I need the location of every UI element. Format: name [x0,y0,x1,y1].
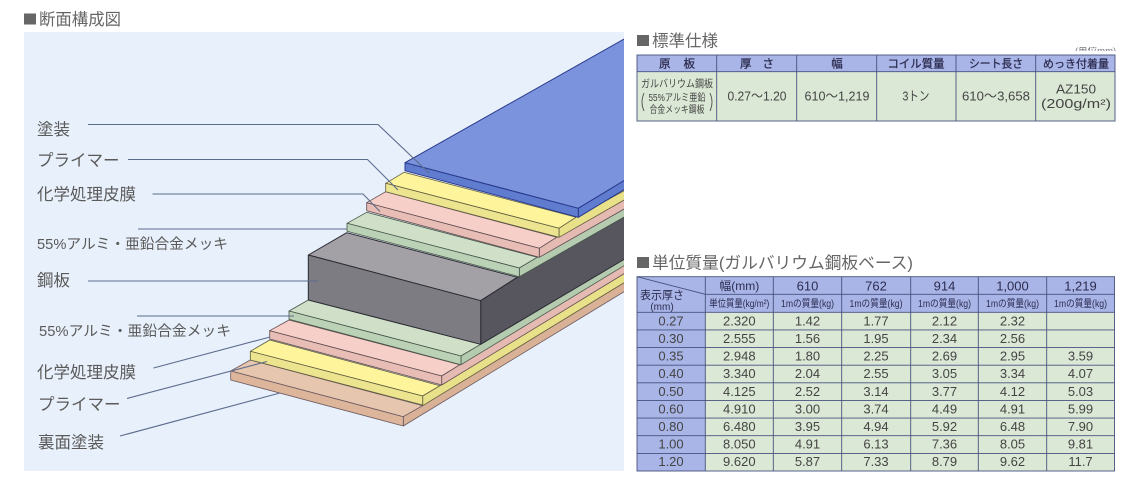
panel: cross-section diagram [24,30,640,471]
heading: unit mass: 単位質量(ガルバリウム鋼板ベース) [652,254,913,272]
table: standard specification [637,55,1115,121]
data rows: 0.35 [658,349,684,364]
data rows: 8.050 [723,437,756,452]
corner header: thickness: (mm) [650,302,674,313]
data rows: 0.50 [658,384,684,399]
table data row: 610〜1,219 [804,88,870,104]
labels: layers: プライマー [37,151,120,170]
header row: widths [719,278,1097,294]
data rows: 3.34 [1000,366,1025,381]
data rows: 5.92 [932,419,957,434]
layer: upper primer [386,172,640,237]
data rows: 2.34 [932,331,957,346]
heading: standard specification: 標準仕様 [652,32,718,50]
data rows: 2.95 [1000,349,1025,364]
header row: units [709,297,1107,310]
data rows: 1.80 [795,349,820,364]
layer: back coating [230,283,624,426]
table header row: 原 板 [659,56,696,70]
data rows: 2.555 [723,331,756,346]
header row: units: 1mの質量(kg) [781,297,834,310]
table: unit mass [637,277,1114,471]
data rows: 1.56 [795,331,820,346]
data rows [658,314,1093,469]
table data row: 0.27〜1.20 [728,88,786,104]
header row: widths: 914 [934,278,955,294]
data rows: 3.05 [932,366,957,381]
data rows: 2.56 [1000,331,1025,346]
corner header: thickness [640,289,684,313]
table header row: めっき付着量 [1043,56,1109,70]
leader lines [88,124,429,436]
table header row: 厚 さ [740,58,774,70]
data rows: 2.04 [795,366,820,381]
table data row: AZ150 [1056,82,1096,96]
labels: layers: 塗装 [37,120,70,139]
layer: lower plating [288,260,624,366]
data rows: 2.55 [863,366,889,381]
data rows: 3.95 [795,419,820,434]
layer: lower primer [250,274,624,406]
labels: layers: 化学処理皮膜 [37,185,136,204]
data rows: 1.20 [658,454,684,469]
data rows: 3.14 [863,384,889,399]
data rows: 2.12 [932,314,957,328]
data rows: 0.27 [658,314,684,328]
data rows: 8.79 [932,454,957,469]
header row: units: 1mの質量(kg) [1054,297,1107,310]
data rows: 1.00 [658,437,684,452]
table header row: 幅 [831,58,843,70]
labels: layers: 55%アルミ・亜鉛合金メッキ [39,323,231,340]
data rows: 0.30 [658,331,684,346]
layer: upper plating [346,210,624,277]
table data row: ガルバリウム鋼板 [641,77,713,90]
data rows: 2.69 [932,349,957,364]
data rows: 4.12 [1000,384,1025,399]
data rows: 5.99 [1068,401,1093,416]
data rows: 7.33 [863,454,889,469]
labels: layers: プライマー [38,395,120,414]
table data row: 610〜3,658 [962,88,1030,104]
layer: upper chemical film [367,190,640,257]
table data row: 55%アルミ亜鉛 [648,92,706,104]
data rows: 2.25 [863,349,889,364]
heading: cross-section: 断面構成図 [39,10,121,29]
data rows: 6.48 [1000,419,1025,434]
header row: widths: 610 [797,278,818,294]
header row: units: 単位質量(kg/m²) [709,297,769,310]
data rows: 3.00 [795,401,820,416]
data rows: 2.948 [723,349,756,364]
data rows: 2.32 [1000,314,1025,328]
header row: units: 1mの質量(kg) [918,297,971,310]
table header row [659,56,1109,70]
data rows: 5.03 [1068,384,1093,399]
data rows: 9.81 [1068,437,1093,452]
header row: widths: 幅(mm) [719,278,759,293]
data rows: 2.320 [723,314,756,328]
data rows: 4.07 [1068,366,1093,381]
data rows: 1.42 [795,314,820,328]
layer: top coating [404,38,624,218]
layer: steel plate [308,218,624,345]
data rows: 0.80 [658,419,684,434]
data rows: 4.91 [795,437,820,452]
data rows: 2.52 [795,384,820,399]
data rows: 1.77 [863,314,889,328]
table data row [641,77,1111,116]
data rows: 0.60 [658,401,684,416]
layer: lower chemical film [269,266,624,386]
table data row: 3トン [902,88,930,104]
data rows: 3.77 [932,384,957,399]
data rows: 4.91 [1000,401,1025,416]
data rows: 4.94 [863,419,889,434]
data rows: 9.62 [1000,454,1025,469]
data rows: 7.36 [932,437,957,452]
data rows: 6.13 [863,437,889,452]
header row: units: 1mの質量(kg) [850,297,902,310]
header row: widths: 1,000 [996,278,1029,294]
table header row: シート長さ [969,58,1023,70]
table header row: コイル質量 [888,56,944,70]
header row: widths: 1,219 [1064,278,1097,294]
data rows: 7.90 [1068,419,1093,434]
data rows: 6.480 [723,419,756,434]
header row: widths: 762 [865,278,887,294]
data rows: 4.125 [723,384,756,399]
data rows: 8.05 [1000,437,1025,452]
labels: layers: 鋼板 [37,271,70,290]
labels: layers: 裏面塗装 [38,433,104,452]
data rows: 4.49 [932,401,957,416]
labels: layers: 化学処理皮膜 [37,363,136,382]
corner header: thickness: 表示厚さ [640,289,684,302]
data rows: 4.910 [723,401,756,416]
table data row: 合金メッキ鋼板 [650,103,704,116]
data rows: 9.620 [723,454,756,469]
data rows: 1.95 [863,331,889,346]
labels: layers: 55%アルミ・亜鉛合金メッキ [37,236,228,253]
table data row: (200g/m²) [1041,96,1111,111]
data rows: 3.74 [863,401,889,416]
data rows: 11.7 [1068,454,1093,469]
data rows: 0.40 [658,366,684,381]
note: unit (cropped): (単位mm) [1075,45,1116,57]
labels: layers [37,120,231,452]
data rows: 3.340 [723,366,756,381]
data rows: 3.59 [1068,349,1093,364]
data rows: 5.87 [795,454,820,469]
diagram: layered steel sheet [231,30,640,426]
header row: units: 1mの質量(kg) [986,297,1039,310]
